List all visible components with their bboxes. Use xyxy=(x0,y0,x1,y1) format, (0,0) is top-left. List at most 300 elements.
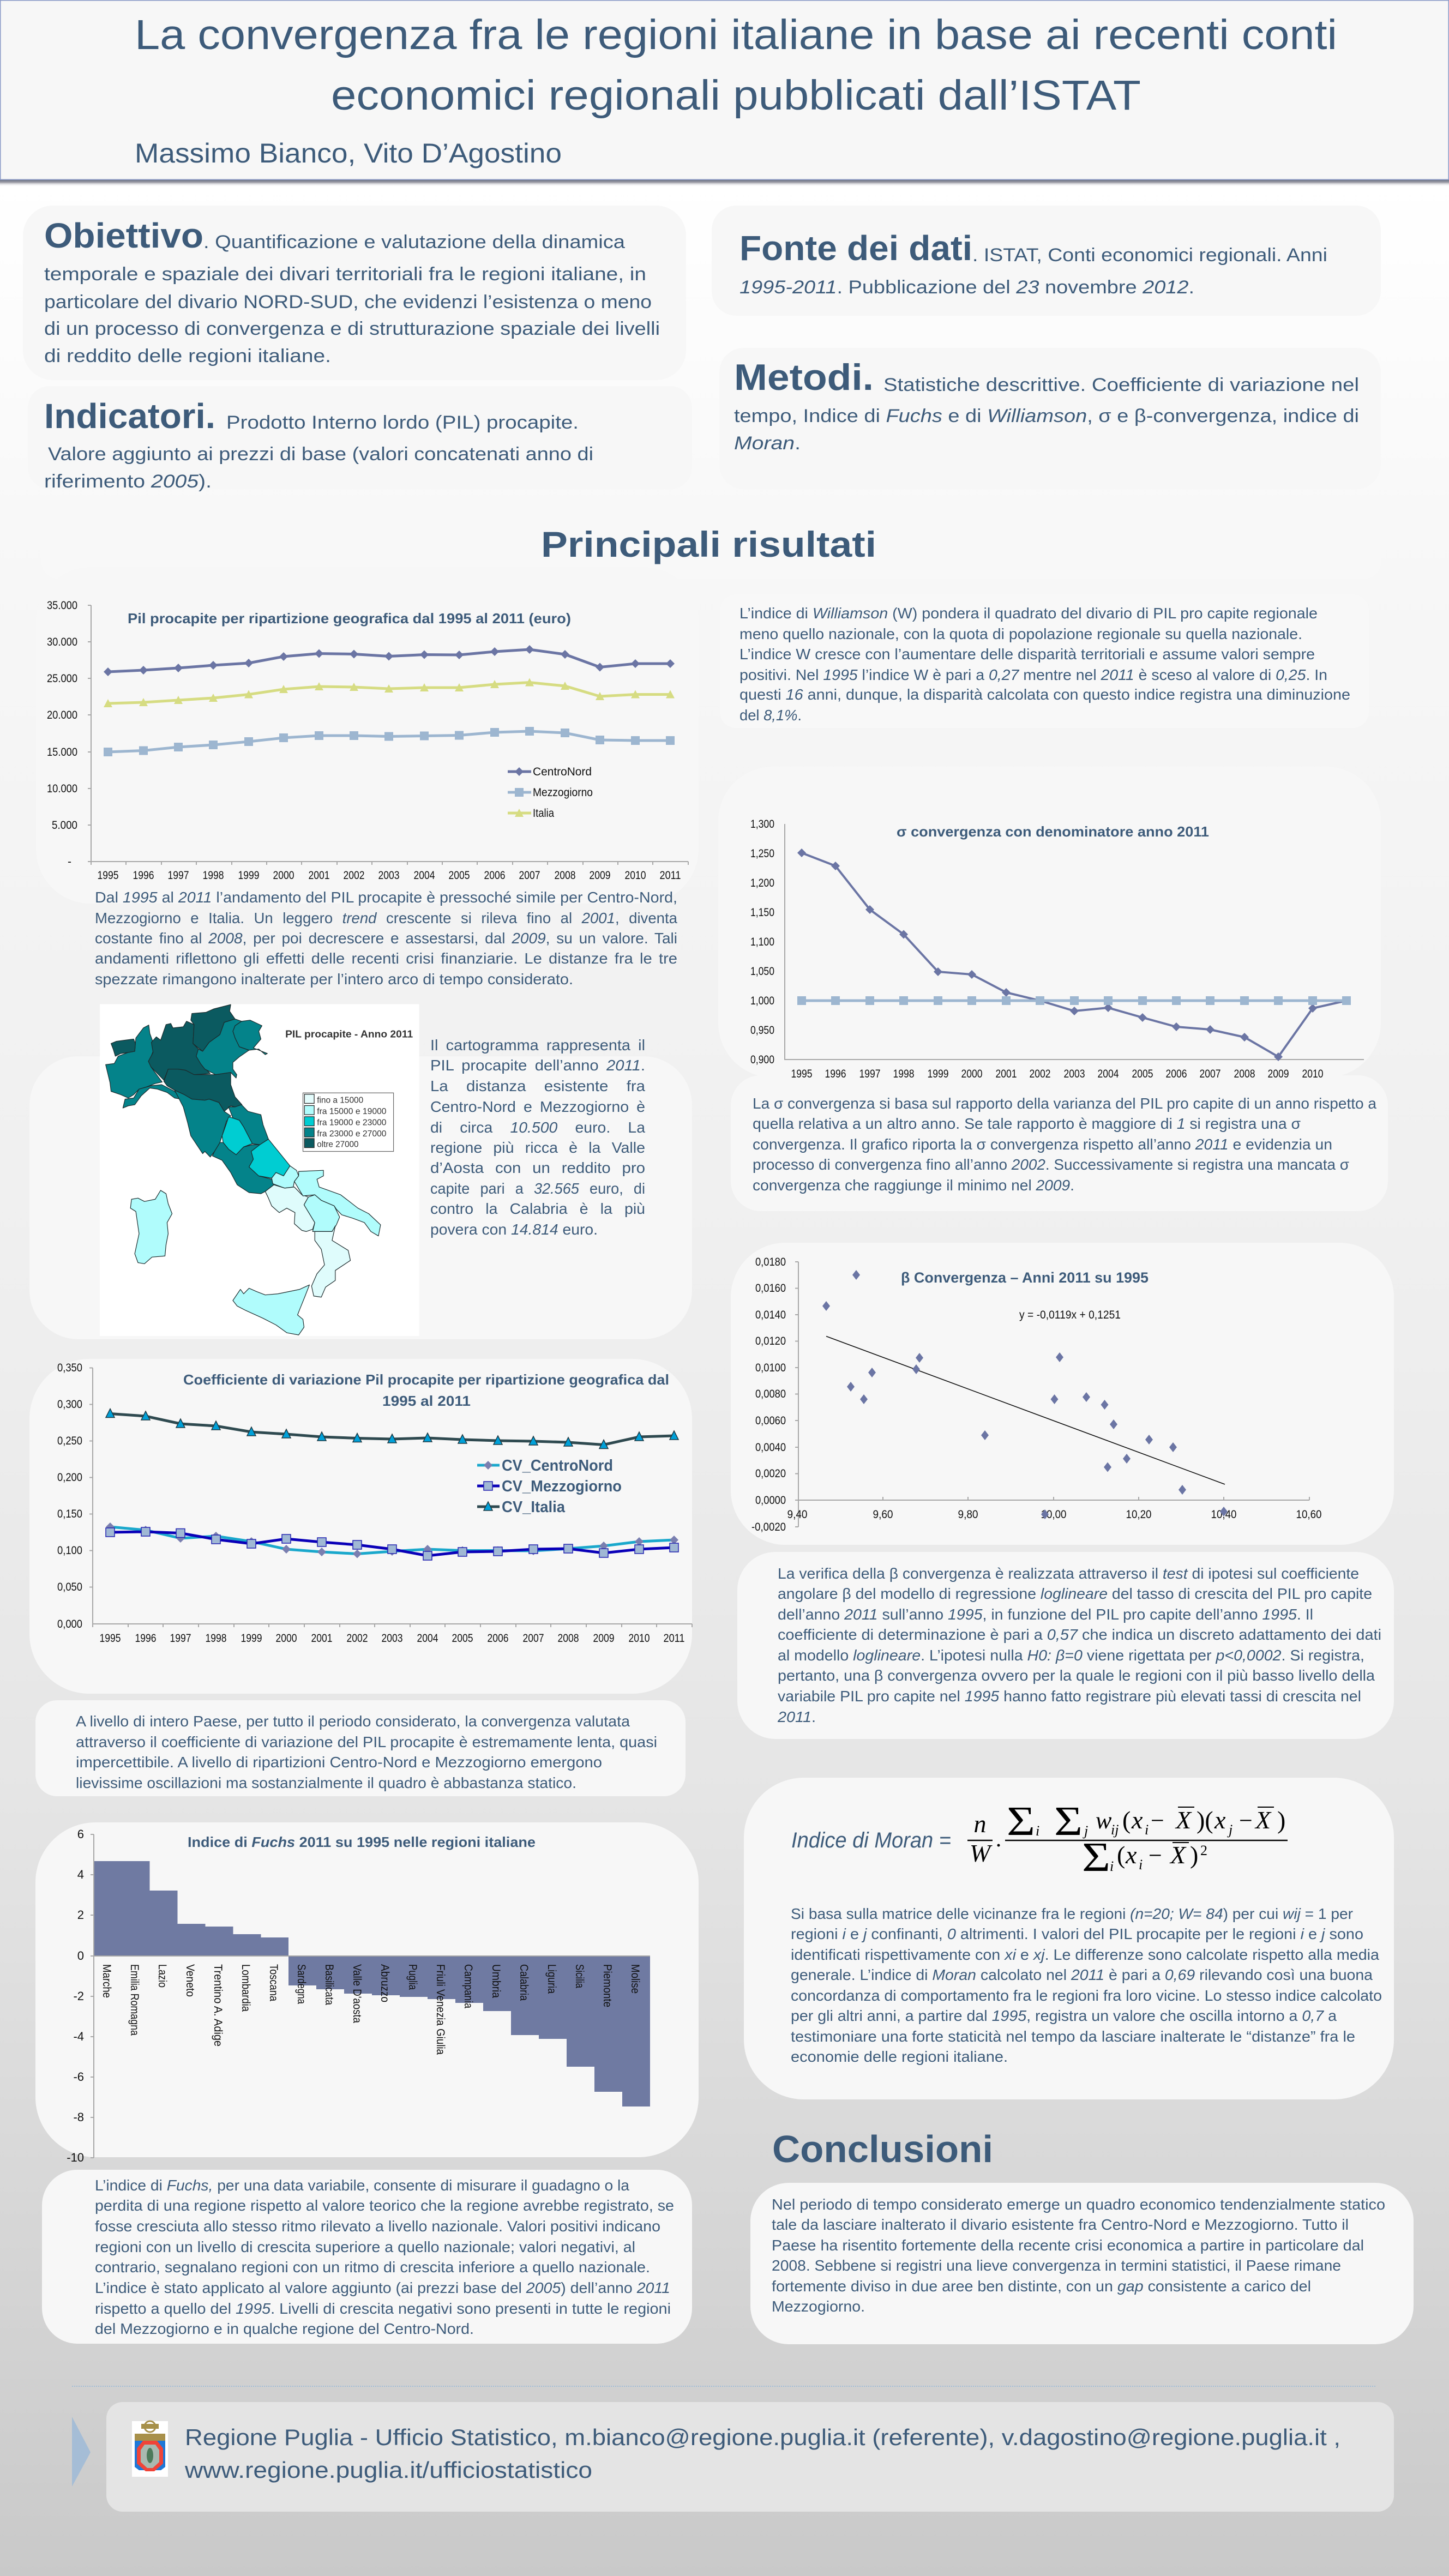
chart: sigma convergenza lines: 2005 xyxy=(1132,1068,1153,1080)
text: conclusioni: fortemente diviso in due aree ben distinte, con un gap consistente a carico del xyxy=(772,2278,1311,2295)
chart: coefficiente di variazione lines xyxy=(57,1362,692,1645)
formula xyxy=(967,1798,1288,1880)
formula: n xyxy=(974,1810,986,1838)
text: indicatori xyxy=(44,412,593,492)
chart: indice di Fuchs bars: Liguria xyxy=(545,1964,558,1994)
text: indice di Williamson: L’indice W cresce con l’aumentare delle disparità territoriali e assume valori sempre xyxy=(739,646,1315,663)
panel: footer xyxy=(106,2402,1394,2512)
legend xyxy=(477,1457,622,1516)
chart: indice di Fuchs bars: Sicilia xyxy=(573,1964,586,1988)
chart title: σ convergenza con denominatore anno 2011 xyxy=(897,823,1209,840)
map: PIL procapite 2011: fra 15000 e 19000 xyxy=(317,1107,387,1116)
text: indice di Moran: per gli altri anni, a partire dal 1995, registra un valore che oscilla intorno a 0,7 a xyxy=(791,2007,1337,2024)
chart: PIL procapite lines xyxy=(47,599,688,882)
chart: beta convergenza scatter: 0,0140 xyxy=(755,1309,786,1321)
formula: j xyxy=(1227,1822,1232,1838)
chart: beta convergenza scatter: 0,0040 xyxy=(755,1441,786,1454)
formula: ij xyxy=(1111,1822,1119,1838)
chart: PIL procapite lines: 15.000 xyxy=(47,746,77,759)
chart: indice di Fuchs bars: -6 xyxy=(73,2070,84,2084)
chart: beta convergenza scatter xyxy=(751,1256,1322,1533)
chart: coefficiente di variazione lines: 1996 xyxy=(135,1632,156,1645)
chart: beta convergenza scatter: 0,0080 xyxy=(755,1388,786,1400)
text: cartogramma: PIL procapite dell’anno 2011. xyxy=(430,1057,645,1074)
chart: indice di Fuchs bars: 0 xyxy=(77,1949,84,1963)
chart: sigma convergenza lines: 1997 xyxy=(859,1068,880,1080)
formula: ( xyxy=(1117,1841,1125,1869)
text: convergenza: attraverso il coefficiente di variazione del PIL procapite è estremamente lenta, quasi xyxy=(76,1734,657,1750)
text: conclusioni: Paese ha risentito fortemente della recente crisi economica a partire in particolare dal xyxy=(772,2237,1364,2254)
chart: PIL procapite lines: 2007 xyxy=(519,869,540,882)
text: obiettivo: particolare del divario NORD-SUD, che evidenzi l’esistenza o meno xyxy=(44,292,652,312)
chart: sigma convergenza lines: 1,100 xyxy=(750,936,774,948)
chart: sigma convergenza lines xyxy=(750,818,1364,1080)
text: cartogramma: contro la Calabria è la più xyxy=(430,1200,645,1217)
text: cartogramma: La distanza esistente fra xyxy=(430,1078,645,1094)
chart: coefficiente di variazione lines: 2006 xyxy=(488,1632,508,1645)
chart: indice di Fuchs bars: Basilicata xyxy=(323,1964,335,2005)
panel: sigma convergenza xyxy=(718,767,1381,1080)
text: indice di Moran: generale. L’indice di Moran calcolato nel 2011 è pari a 0,69 rilevando così una buona xyxy=(791,1966,1373,1983)
text: conclusioni: Mezzogiorno. xyxy=(772,2298,865,2315)
formula: i xyxy=(1145,1822,1149,1838)
chart: sigma convergenza lines: 2007 xyxy=(1200,1068,1220,1080)
legend: Mezzogiorno xyxy=(533,786,593,799)
text: cartogramma: regione più ricca è la Valle xyxy=(430,1139,645,1156)
text: sigma convergenza: La σ convergenza si basa sul rapporto della varianza del PIL pro capite di un anno rispetto a xyxy=(753,1095,1376,1112)
text: fonte dei dati: . ISTAT, Conti economici regionali. Anni xyxy=(972,245,1327,266)
panel: obiettivo xyxy=(23,206,686,380)
chart: coefficiente di variazione lines: 0,350 xyxy=(57,1362,82,1374)
text: conclusioni xyxy=(772,2196,1385,2315)
panel: chart PIL procapite xyxy=(36,567,699,904)
text: indicatori: Valore aggiunto ai prezzi di base (valori concatenati anno di xyxy=(48,444,593,465)
chart: indice di Fuchs bars: Sardegna xyxy=(295,1964,308,2004)
text: indice di Williamson: positivi. Nel 1995 l’indice W è pari a 0,27 mentre nel 2011 è sceso al valore di 0,25. In xyxy=(739,666,1327,683)
formula: Σ xyxy=(1054,1798,1083,1844)
text: fonte dei dati xyxy=(739,245,1327,298)
panel: indice di Fuchs xyxy=(35,1822,699,2164)
formula: x xyxy=(1214,1806,1226,1834)
chart: sigma convergenza lines: 2001 xyxy=(996,1068,1017,1080)
chart: beta convergenza scatter: 9,40 xyxy=(787,1508,807,1521)
panel: principali risultati xyxy=(41,502,1381,579)
map: PIL procapite 2011: fra 19000 e 23000 xyxy=(317,1118,387,1127)
map: PIL procapite 2011: PIL procapite - Anno 2011 xyxy=(285,1028,413,1040)
text: conclusioni: 2008. Sebbene si registri una lieve convergenza in termini statistici, il Paese rimane xyxy=(772,2257,1341,2274)
chart: beta convergenza scatter: 0,0020 xyxy=(755,1467,786,1480)
chart: indice di Fuchs bars: -10 xyxy=(67,2151,84,2164)
chart: beta convergenza scatter: 0,0000 xyxy=(755,1494,786,1507)
chart: sigma convergenza lines: 2003 xyxy=(1063,1068,1085,1080)
text: metodi xyxy=(734,375,1359,454)
panel: commento beta convergenza xyxy=(737,1552,1394,1739)
authors: Massimo Bianco, Vito D’Agostino xyxy=(135,138,562,168)
text: metodi: Statistiche descrittive. Coefficiente di variazione nel xyxy=(883,375,1359,395)
text: cartogramma: capite pari a 32.565 euro, di xyxy=(430,1180,645,1197)
chart: sigma convergenza lines: 1,150 xyxy=(750,906,774,919)
text: andamento PIL: spezzate rimangono inalterate per l’intero arco di tempo considerato. xyxy=(95,971,573,988)
text: beta convergenza: La verifica della β convergenza è realizzata attraverso il test di ipotesi sul coefficiente xyxy=(778,1565,1359,1582)
text: cartogramma xyxy=(430,1037,645,1238)
chart: PIL procapite lines: 2011 xyxy=(660,869,681,882)
chart: PIL procapite lines: 35.000 xyxy=(47,599,77,612)
chart title: β Convergenza – Anni 2011 su 1995 xyxy=(901,1269,1149,1286)
chart: indice di Fuchs bars: -2 xyxy=(73,1989,84,2003)
text: indice di Moran: concordanza di comportamento fra le regioni fra loro vicine. Lo stesso indice calcolato xyxy=(791,1987,1382,2004)
heading: principali risultati: Principali risultati xyxy=(541,524,876,564)
chart: coefficiente di variazione lines: 2000 xyxy=(276,1632,297,1645)
panel: fonte dei dati xyxy=(712,206,1381,316)
formula: W xyxy=(970,1839,993,1867)
formula: i xyxy=(1110,1858,1114,1874)
chart: PIL procapite lines: 5.000 xyxy=(52,819,77,832)
chart: PIL procapite lines: 1996 xyxy=(133,869,154,882)
chart: beta convergenza scatter: 0,0100 xyxy=(755,1362,786,1374)
formula: Σ xyxy=(1082,1834,1110,1880)
panel: commento sigma convergenza xyxy=(731,1075,1388,1211)
text: contatti: www.regione.puglia.it/ufficiostatistico xyxy=(184,2457,592,2483)
text: conclusioni: Nel periodo di tempo considerato emerge un quadro economico tendenzialmente statico xyxy=(772,2196,1385,2213)
formula: j xyxy=(1083,1823,1088,1839)
heading: metodi: Metodi. xyxy=(734,357,874,398)
text: indice di Moran: economie delle regioni italiane. xyxy=(791,2048,1008,2065)
heading: indicatori: Indicatori. xyxy=(44,396,215,436)
text: sigma convergenza: convergenza che raggiunge il minimo nel 2009. xyxy=(753,1177,1074,1194)
text: cartogramma: Il cartogramma rappresenta il xyxy=(430,1037,645,1054)
chart: sigma convergenza lines: 1,250 xyxy=(750,847,774,860)
chart: beta convergenza scatter: y = -0,0119x + 0,1251 xyxy=(1019,1309,1121,1321)
text: beta convergenza: al modello loglineare. L’ipotesi nulla H0: β=0 viene rigettata per p<0,0002. Si registra, xyxy=(778,1647,1364,1664)
chart: coefficiente di variazione lines: 1998 xyxy=(205,1632,227,1645)
text: indice di Fuchs: fosse cresciuta allo stesso ritmo rilevato a livello nazionale. Valori positivi indicano xyxy=(95,2218,660,2235)
chart: sigma convergenza lines: 1,000 xyxy=(750,995,774,1007)
text: indice di Moran: identificati rispettivamente con xi e xj. Le differenze sono calcolate rispetto alla media xyxy=(791,1946,1379,1963)
chart: PIL procapite lines: 2003 xyxy=(378,869,399,882)
chart: PIL procapite lines: 2005 xyxy=(448,869,470,882)
chart: beta convergenza scatter: 0,0060 xyxy=(755,1415,786,1427)
chart: coefficiente di variazione lines: 2003 xyxy=(382,1632,402,1645)
chart: indice di Fuchs bars: Piemonte xyxy=(601,1964,614,2007)
formula: X xyxy=(1169,1841,1187,1869)
text: indice di Williamson: L’indice di Williamson (W) pondera il quadrato del divario di PIL pro capite regionale xyxy=(739,605,1318,622)
text: contatti: Regione Puglia - Ufficio Statistico, m.bianco@regione.puglia.it (referente), v.dagostino@regione.puglia.it , xyxy=(185,2424,1340,2450)
chart: indice di Fuchs bars: Friuli Venezia Giulia xyxy=(434,1964,447,2055)
text: obiettivo: di un processo di convergenza e di strutturazione spaziale dei livelli xyxy=(44,318,660,339)
chart: PIL procapite lines: 2004 xyxy=(413,869,435,882)
chart: sigma convergenza lines: 2010 xyxy=(1302,1068,1323,1080)
chart: PIL procapite lines: 1997 xyxy=(168,869,189,882)
chart: beta convergenza scatter: 0,0180 xyxy=(755,1256,786,1268)
text: indice di Fuchs xyxy=(95,2177,674,2337)
text: beta convergenza: variabile PIL pro capite nel 1995 hanno fatto registrare più elevati tassi di crescita nel xyxy=(778,1688,1361,1705)
chart title: 1995 al 2011 xyxy=(382,1393,471,1409)
legend xyxy=(508,766,593,820)
title xyxy=(135,11,1337,119)
chart: coefficiente di variazione lines: 2009 xyxy=(593,1632,614,1645)
map: PIL procapite 2011 xyxy=(100,1004,419,1336)
formula: ( xyxy=(1122,1806,1131,1834)
chart: beta convergenza scatter: 0,0160 xyxy=(755,1282,786,1295)
text: cartogramma: d’Aosta con un reddito pro xyxy=(430,1159,645,1176)
text: indice di Fuchs: del Mezzogiorno e in qualche regione del Centro-Nord. xyxy=(95,2320,474,2337)
chart: sigma convergenza lines: 0,950 xyxy=(750,1024,774,1037)
text: indicatori: Prodotto Interno lordo (PIL) procapite. xyxy=(226,412,579,433)
chart: sigma convergenza lines: 2009 xyxy=(1267,1068,1289,1080)
chart: PIL procapite lines: 2006 xyxy=(484,869,505,882)
chart title: Pil procapite per ripartizione geografica dal 1995 al 2011 (euro) xyxy=(128,610,571,627)
chart: coefficiente di variazione lines: 0,250 xyxy=(57,1435,82,1447)
chart: coefficiente di variazione lines: 2008 xyxy=(557,1632,579,1645)
chart title xyxy=(183,1371,669,1409)
chart: coefficiente di variazione lines: 0,300 xyxy=(57,1398,82,1411)
text: metodi: tempo, Indice di Fuchs e di Williamson , σ e β-convergenza, indice di xyxy=(734,406,1359,426)
chart: indice di Fuchs bars: 4 xyxy=(77,1868,84,1881)
chart title: Coefficiente di variazione Pil procapite per ripartizione geografica dal xyxy=(183,1371,669,1388)
panel: commento coefficiente di variazione xyxy=(35,1700,686,1796)
text: cartogramma: Centro-Nord e Mezzogiorno è xyxy=(430,1098,645,1115)
chart: indice di Fuchs bars: Marche xyxy=(100,1964,113,1998)
text: indice di Fuchs: perdita di una regione rispetto al valore teorico che la regione avrebbe registrato, se xyxy=(95,2197,674,2214)
chart: coefficiente di variazione lines: 0,050 xyxy=(57,1581,82,1593)
text: metodi: Moran . xyxy=(734,433,801,454)
chart: beta convergenza scatter: 9,60 xyxy=(873,1508,893,1521)
formula: ) xyxy=(1190,1841,1198,1869)
chart: PIL procapite lines: 1998 xyxy=(203,869,224,882)
arrow xyxy=(72,2417,91,2487)
chart: beta convergenza scatter: 9,80 xyxy=(958,1508,978,1521)
text: andamento PIL: Mezzogiorno e Italia. Un leggero trend crescente si rileva fino al 2001, diventa xyxy=(95,910,677,926)
panel: indicatori xyxy=(28,386,692,492)
chart: sigma convergenza lines: 1995 xyxy=(791,1068,813,1080)
chart: sigma convergenza lines: 0,900 xyxy=(750,1054,774,1066)
chart: indice di Fuchs bars: 6 xyxy=(77,1827,84,1841)
chart: PIL procapite lines: 2001 xyxy=(309,869,329,882)
chart: beta convergenza scatter: 10,00 xyxy=(1041,1508,1067,1521)
text: indice di Williamson xyxy=(739,605,1350,724)
chart: coefficiente di variazione lines: 2011 xyxy=(663,1632,685,1645)
chart: sigma convergenza lines: 2002 xyxy=(1030,1068,1050,1080)
text: convergenza xyxy=(76,1713,657,1791)
chart: sigma convergenza lines: 1996 xyxy=(825,1068,846,1080)
panel: beta convergenza xyxy=(731,1243,1394,1545)
text: beta convergenza: angolare β del modello di regressione loglineare del tasso di crescita del PIL pro capite xyxy=(778,1585,1372,1602)
chart: PIL procapite lines: 30.000 xyxy=(47,636,77,648)
text: sigma convergenza: quella relativa a un altro anno. Se tale rapporto è maggiore di 1 si registra una σ xyxy=(753,1115,1301,1132)
chart: coefficiente di variazione lines: 0,200 xyxy=(57,1471,82,1484)
text: indice di Moran: regioni i e j confinanti, 0 altrimenti. I valori del PIL procapite per le regioni i e j sono xyxy=(791,1925,1363,1942)
text: indice di Fuchs: L’indice è stato applicato al valore aggiunto (ai prezzi base del 2005) dell’anno 2011 xyxy=(95,2279,670,2296)
text: sigma convergenza: processo di convergenza fino all’anno 2002. Successivamente si registra una mancata σ xyxy=(753,1156,1349,1173)
chart: indice di Fuchs bars: 2 xyxy=(77,1908,84,1922)
map: PIL procapite 2011: fra 23000 e 27000 xyxy=(317,1129,387,1139)
chart: indice di Fuchs bars: Puglia xyxy=(406,1964,419,1990)
chart: indice di Fuchs bars xyxy=(67,1827,650,2164)
chart: indice di Fuchs bars: -8 xyxy=(73,2110,84,2124)
chart: PIL procapite lines: 2009 xyxy=(589,869,611,882)
text: sigma convergenza xyxy=(753,1095,1376,1194)
text: cartogramma: di circa 10.500 euro. La xyxy=(430,1119,645,1136)
chart: coefficiente di variazione lines: 2005 xyxy=(452,1632,473,1645)
formula: i xyxy=(1139,1857,1143,1873)
legend: CV_CentroNord xyxy=(502,1457,613,1474)
text: indice di Fuchs: rispetto a quello del 1995. Livelli di crescita negativi sono presenti in tutte le regioni xyxy=(95,2300,671,2317)
text: beta convergenza: coefficiente di determinazione è pari a 0,57 che indica un discreto adattamento dei dati xyxy=(778,1626,1381,1643)
icon: stemma Regione Puglia xyxy=(132,2421,168,2477)
chart: PIL procapite lines: 1999 xyxy=(238,869,260,882)
formula: − xyxy=(1239,1807,1253,1834)
legend: Italia xyxy=(533,807,554,820)
chart: sigma convergenza lines: 1,200 xyxy=(750,877,774,889)
chart: PIL procapite lines: 25.000 xyxy=(47,672,77,685)
chart: PIL procapite lines: 1995 xyxy=(97,869,119,882)
text: andamento PIL: Dal 1995 al 2011 l’andamento del PIL procapite è pressoché simile per Centro-Nord, xyxy=(95,889,677,906)
formula: − xyxy=(1151,1807,1164,1834)
chart: indice di Fuchs bars: Lombardia xyxy=(239,1964,252,2012)
chart: indice di Fuchs bars: -4 xyxy=(73,2030,84,2043)
text: indicatori: riferimento 2005 ). xyxy=(44,471,212,492)
map: PIL procapite 2011: fino a 15000 xyxy=(317,1096,363,1105)
chart: PIL procapite lines: 2002 xyxy=(344,869,364,882)
formula: w xyxy=(1096,1807,1112,1834)
map: PIL procapite 2011: oltre 27000 xyxy=(317,1140,359,1149)
chart: coefficiente di variazione lines: 1999 xyxy=(241,1632,262,1645)
chart: sigma convergenza lines: 1999 xyxy=(927,1068,949,1080)
chart: beta convergenza scatter: 10,40 xyxy=(1211,1508,1237,1521)
chart: indice di Fuchs bars: Trentino A. Adige xyxy=(212,1964,224,2047)
legend: CV_Mezzogiorno xyxy=(502,1478,622,1495)
chart: coefficiente di variazione lines: 2007 xyxy=(522,1632,544,1645)
formula: X xyxy=(1254,1806,1272,1834)
chart: beta convergenza scatter: 0,0120 xyxy=(755,1335,786,1347)
formula: )( xyxy=(1197,1806,1213,1834)
text: convergenza: lievissime oscillazioni ma sostanzialmente il quadro è abbastanza statico. xyxy=(76,1774,576,1791)
chart: PIL procapite lines: 10.000 xyxy=(47,783,77,795)
chart: sigma convergenza lines: 2006 xyxy=(1166,1068,1187,1080)
heading: conclusioni: Conclusioni xyxy=(772,2128,993,2170)
text: beta convergenza: 2011. xyxy=(777,1708,816,1725)
legend: CentroNord xyxy=(533,766,592,778)
chart: sigma convergenza lines: 2008 xyxy=(1234,1068,1255,1080)
text: beta convergenza: dell’anno 2011 sull’anno 1995, in funzione del PIL pro capite dell’anno 1995. Il xyxy=(778,1606,1313,1623)
panel: indice di Williamson xyxy=(720,594,1369,728)
chart: indice di Fuchs bars: Campania xyxy=(462,1964,474,2008)
title: La convergenza fra le regioni italiane in base ai recenti conti xyxy=(135,11,1337,58)
text: indice di Williamson: questi 16 anni, dunque, la disparità calcolata con questo indice registra una diminuzione xyxy=(739,686,1350,703)
text: sigma convergenza: convergenza. Il grafico riporta la σ convergenza rispetto all’anno 2011 e evidenzia un xyxy=(753,1136,1332,1153)
chart: PIL procapite lines: - xyxy=(68,856,71,868)
text: beta convergenza xyxy=(777,1565,1381,1725)
chart: coefficiente di variazione lines: 2001 xyxy=(311,1632,333,1645)
text: convergenza: impercettibile. A livello di ripartizioni Centro-Nord e Mezzogiorno emergono xyxy=(76,1754,602,1771)
text: conclusioni: tale da lasciare inalterato il divario esistente fra Centro-Nord e Mezzogiorno. Tutto il xyxy=(772,2216,1349,2233)
text: indice di Moran xyxy=(791,1905,1382,2065)
chart: coefficiente di variazione lines: 0,150 xyxy=(57,1508,82,1520)
panel: commento indice di Fuchs xyxy=(42,2170,692,2344)
text: indice di Fuchs: contrario, segnalano regioni con un ritmo di crescita inferiore a quello nazionale. xyxy=(95,2259,650,2276)
panel: metodi xyxy=(719,348,1381,489)
chart: indice di Fuchs bars: Emilia Romagna xyxy=(128,1964,141,2036)
formula: ) xyxy=(1277,1806,1285,1834)
text: andamento PIL xyxy=(95,889,677,988)
formula: − xyxy=(1149,1842,1162,1869)
chart title: Indice di Fuchs 2011 su 1995 nelle regioni italiane xyxy=(188,1834,536,1850)
title: economici regionali pubblicati dall’ISTAT xyxy=(331,72,1141,119)
text: cartogramma: povera con 14.814 euro. xyxy=(430,1221,598,1238)
panel: coefficiente di variazione xyxy=(29,1359,692,1694)
text: indice di Williamson: del 8,1%. xyxy=(739,707,802,724)
chart: sigma convergenza lines: 1,300 xyxy=(750,818,774,830)
text: obiettivo: temporale e spaziale dei divari territoriali fra le regioni italiane, in xyxy=(44,264,646,285)
chart: indice di Fuchs bars: Abruzzo xyxy=(378,1964,391,2002)
chart: coefficiente di variazione lines: 1997 xyxy=(170,1632,191,1645)
panel: cartogramma xyxy=(29,1004,692,1339)
text: indice di Fuchs: L’indice di Fuchs, per una data variabile, consente di misurare il guadagno o la xyxy=(95,2177,629,2194)
chart: indice di Fuchs bars: Toscana xyxy=(267,1964,280,2001)
text: indice di Moran: Si basa sulla matrice delle vicinanze fra le regioni (n=20; W= 84) per cui wij = 1 per xyxy=(791,1905,1353,1922)
chart: PIL procapite lines: 2010 xyxy=(625,869,646,882)
chart: indice di Fuchs bars: Veneto xyxy=(184,1964,196,1997)
text: andamento PIL: costante fino al 2008, per poi decrescere e assestarsi, dal 2009, su un valore. Tali xyxy=(95,930,677,947)
chart: beta convergenza scatter: 10,20 xyxy=(1126,1508,1152,1521)
chart: coefficiente di variazione lines: 2004 xyxy=(417,1632,438,1645)
text: indice di Fuchs: regioni con un livello di crescita superiore a quello nazionale; valori negativi, al xyxy=(95,2238,635,2255)
chart: PIL procapite lines: 2008 xyxy=(554,869,576,882)
text: beta convergenza: pertanto, una β convergenza ovvero per la quale le regioni con il più basso livello della xyxy=(778,1667,1375,1684)
chart: beta convergenza scatter: -0,0020 xyxy=(751,1521,786,1533)
text: convergenza: A livello di intero Paese, per tutto il periodo considerato, la convergenza valutata xyxy=(76,1713,630,1730)
chart: sigma convergenza lines: 1998 xyxy=(893,1068,914,1080)
chart: indice di Fuchs bars: Umbria xyxy=(490,1964,502,1998)
chart: indice di Fuchs bars: Valle D'aosta xyxy=(351,1964,363,2023)
text: fonte dei dati: 1995-2011 . Pubblicazione del 23 novembre 2012 . xyxy=(739,277,1194,298)
heading: obiettivo: Obiettivo xyxy=(44,216,203,255)
chart: coefficiente di variazione lines: 2010 xyxy=(628,1632,650,1645)
chart: sigma convergenza lines: 1,050 xyxy=(750,965,774,978)
text: contatti xyxy=(184,2424,1340,2483)
chart: indice di Fuchs bars: Calabria xyxy=(518,1964,530,2001)
text: andamento PIL: andamenti riflettono gli effetti delle recenti crisi finanziarie. Le distanze fra le tre xyxy=(95,950,677,967)
formula: i xyxy=(1036,1823,1039,1839)
formula: x xyxy=(1131,1806,1143,1834)
chart: PIL procapite lines: 2000 xyxy=(273,869,294,882)
text: obiettivo xyxy=(44,232,660,366)
chart: sigma convergenza lines: 2000 xyxy=(961,1068,983,1080)
chart: coefficiente di variazione lines: 0,100 xyxy=(57,1544,82,1557)
panel: conclusioni xyxy=(750,2183,1414,2344)
text: indice di Williamson: meno quello nazionale, con la quota di popolazione regionale su quella nazionale. xyxy=(739,625,1302,642)
formula: X xyxy=(1175,1806,1192,1834)
panel: indice di Moran xyxy=(744,1778,1394,2099)
legend: CV_Italia xyxy=(502,1498,566,1516)
formula label: Indice di Moran = xyxy=(791,1828,951,1852)
header band xyxy=(0,1,1449,186)
chart: coefficiente di variazione lines: 2002 xyxy=(347,1632,368,1645)
text: obiettivo: . Quantificazione e valutazione della dinamica xyxy=(203,232,625,252)
chart: sigma convergenza lines: 2004 xyxy=(1097,1068,1119,1080)
text: obiettivo: di reddito delle regioni italiane. xyxy=(44,346,331,366)
formula: Σ xyxy=(1007,1798,1035,1844)
chart: beta convergenza scatter: 10,60 xyxy=(1296,1508,1322,1521)
formula: x xyxy=(1125,1841,1137,1869)
heading: fonte dei dati: Fonte dei dati xyxy=(739,228,972,268)
formula: 2 xyxy=(1200,1843,1207,1858)
chart: indice di Fuchs bars: Molise xyxy=(629,1964,641,1994)
chart: coefficiente di variazione lines: 1995 xyxy=(99,1632,121,1645)
chart: indice di Fuchs bars: Lazio xyxy=(156,1964,169,1988)
chart: coefficiente di variazione lines: 0,000 xyxy=(57,1618,82,1630)
text: indice di Moran: testimoniare una forte staticità nel tempo da lasciare inalterate le “distanze” fra le xyxy=(791,2028,1355,2045)
